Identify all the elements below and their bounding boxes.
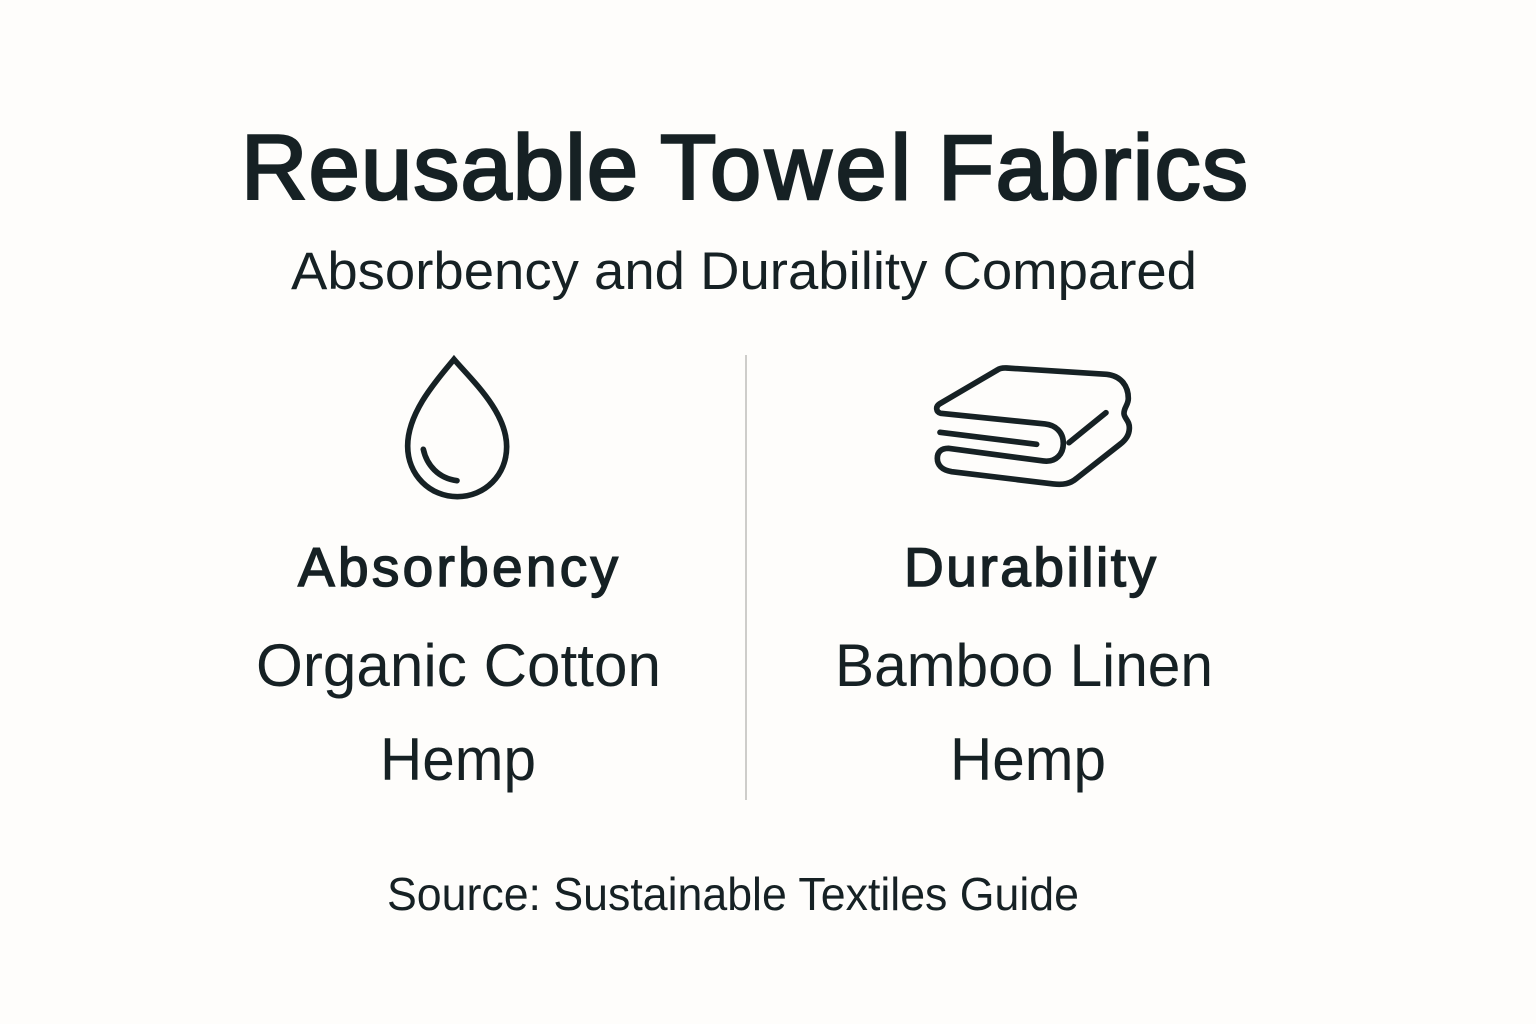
icon: water drop [408, 359, 507, 497]
heading: absorbency: Absorbency [298, 536, 618, 598]
source note: Source: Sustainable Textiles Guide [387, 868, 1079, 920]
panel: absorbency [256, 359, 661, 793]
vertical divider [745, 355, 747, 800]
title: Reusable [241, 117, 638, 219]
subtitle: Absorbency and Durability Compared [291, 242, 1197, 301]
icon: folded towel [937, 368, 1129, 484]
item: hemp: Hemp [950, 726, 1106, 793]
heading: durability: Durability [904, 536, 1156, 598]
item: organic cotton: Organic Cotton [256, 632, 661, 699]
title [241, 117, 1248, 219]
title: Towel [660, 117, 911, 219]
title: Fabrics [938, 117, 1248, 219]
item: bamboo linen: Bamboo Linen [835, 632, 1213, 699]
item: hemp: Hemp [380, 726, 536, 793]
panel: durability [835, 368, 1213, 793]
